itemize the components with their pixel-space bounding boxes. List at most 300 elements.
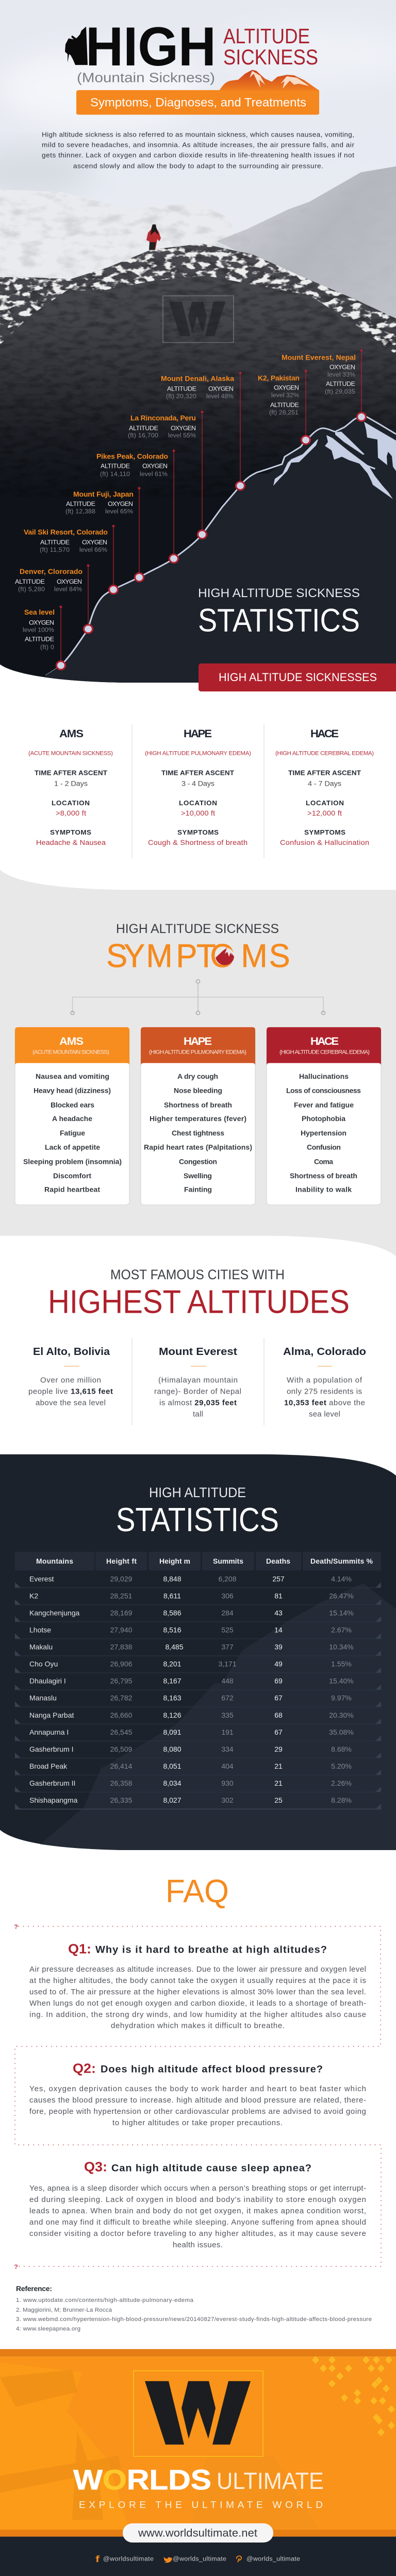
faq: question 2 xyxy=(29,2061,366,2127)
card: HACE symptoms: HACE xyxy=(310,1036,339,1047)
row: K2: 306 xyxy=(221,1592,234,1600)
heading: high altitude sickness statistics: STATISTICS xyxy=(198,602,360,638)
row: Manaslu: 672 xyxy=(221,1694,234,1702)
label: Vail Ski Resort xyxy=(24,529,108,553)
label: Mount Fuji: ALTITUDE xyxy=(66,500,95,507)
heading: high altitude sickness statistics xyxy=(198,586,360,638)
row: Gasherbrum II: 930 xyxy=(221,1780,234,1787)
text block: references: Reference: xyxy=(16,2285,52,2293)
faq: question 1: Air pressure decreases as altitude increases. Due to the lower air pressure and oxygen level xyxy=(29,1965,366,1974)
row: Broad Peak: 21 xyxy=(274,1762,283,1770)
faq: question 3 xyxy=(29,2159,366,2249)
city: Alma: 10,353 feet above the xyxy=(284,1399,365,1407)
card: HAPE symptoms: Congestion xyxy=(179,1158,217,1165)
row: Annapurna I: Annapurna I xyxy=(29,1728,69,1736)
row: Kangchenjunga xyxy=(29,1609,354,1617)
row: Lhotse: 27,940 xyxy=(110,1626,133,1634)
chart: altitude and oxygen mountain profile xyxy=(15,349,396,689)
pin: K2 marker xyxy=(301,370,310,444)
city: El Alto: Over one million xyxy=(40,1377,101,1384)
text block: references: 3. www.webmd.com/hypertension-high-blood-pressure/news/20140827/everest-study-finds-high-altitude-affects-blood-pressure xyxy=(16,2316,372,2323)
row: Nanga Parbat: 68 xyxy=(274,1711,283,1719)
faq: question 1 xyxy=(29,1941,366,2030)
row: Gasherbrum I: 26,509 xyxy=(110,1745,132,1753)
label: Vail Ski Resort: OXYGEN xyxy=(82,539,107,546)
column: HACE: TIME AFTER ASCENT xyxy=(288,769,361,777)
heading: high altitude sickness symptoms: SYMPTOMS xyxy=(106,938,290,974)
card: AMS symptoms: Heavy head (dizziness) xyxy=(34,1087,111,1095)
faq: question 3: health issues. xyxy=(173,2241,223,2249)
icon: facebook: f xyxy=(95,2554,100,2564)
column: AMS: AMS xyxy=(59,727,84,740)
faq: question 1: ing. In addition, the strong dry winds, and low humidity at the higher altitudes also cause xyxy=(29,2011,366,2019)
label: K2: level 32% xyxy=(271,392,299,399)
card: HACE symptoms: Hypertension xyxy=(301,1129,346,1137)
column: HACE: Confusion & Hallucination xyxy=(280,839,369,847)
column: AMS: (ACUTE MOUNTAIN SICKNESS) xyxy=(28,751,113,756)
row: Everest: 6,208 xyxy=(218,1575,237,1583)
text block: introduction: mild to severe headaches, and insomnia. As altitude increases, the air pressure falls, and air xyxy=(42,141,355,149)
row: Gasherbrum I: 8.68% xyxy=(331,1745,352,1753)
panel: statistics table background xyxy=(0,1454,396,1850)
row: Lhotse xyxy=(29,1626,352,1634)
column: HAPE xyxy=(145,727,251,847)
footer: worlds ultimate brand xyxy=(0,2349,396,2537)
label: Mount Denali xyxy=(161,375,234,400)
row: Manaslu: 9.97% xyxy=(331,1694,352,1702)
city: Alma: only 275 residents is xyxy=(287,1388,362,1396)
row: Gasherbrum II: 26,358 xyxy=(110,1780,133,1787)
card: HAPE symptoms: Swelling xyxy=(184,1172,212,1180)
heading: most famous cities with highest altitudes: HIGHEST ALTITUDES xyxy=(48,1283,350,1320)
city: El Alto: people live 13,615 feet xyxy=(28,1388,113,1396)
card: HAPE symptoms: A dry cough xyxy=(177,1073,218,1080)
faq: question 1: Q1: xyxy=(68,1941,91,1956)
row: Shishapangma: 302 xyxy=(221,1797,234,1804)
text block: introduction: High altitude sickness is also referred to as mountain sickness, which causes nausea, vomiting, xyxy=(42,131,354,139)
label: Mount Everest: OXYGEN xyxy=(329,364,355,370)
label: Pikes Peak: Pikes Peak, Colorado xyxy=(96,453,168,460)
pin: Fuji marker xyxy=(135,487,143,582)
pin: La Rinconada marker xyxy=(198,411,206,539)
icon: mountain inside O xyxy=(216,947,235,965)
social links: @worldsultimate xyxy=(103,2555,154,2562)
row: Dhaulagiri I: 26,795 xyxy=(110,1677,133,1685)
column: HACE: >12,000 ft xyxy=(307,809,342,818)
banner: high altitude sicknesses xyxy=(199,664,396,691)
heading: high altitude statistics xyxy=(116,1485,279,1539)
title: HIGH: HIGH xyxy=(86,16,216,77)
row: Annapurna I: 35.08% xyxy=(329,1728,354,1736)
column: HAPE: Cough & Shortness of breath xyxy=(148,839,248,847)
card: AMS symptoms: AMS xyxy=(59,1036,84,1047)
card: AMS symptoms: A headache xyxy=(52,1115,92,1123)
text block: references: 4: www.sleepapnea.org xyxy=(16,2326,80,2332)
banner: high altitude sicknesses: HIGH ALTITUDE SICKNESSES xyxy=(219,671,377,684)
text block: introduction: ascend slowly and allow the body to adapt to the surrounding air pressure. xyxy=(73,162,323,170)
heading: most famous cities with highest altitudes xyxy=(48,1266,350,1320)
column: HAPE: 3 - 4 Days xyxy=(182,780,214,788)
card: HACE symptoms xyxy=(267,1027,381,1205)
banner: orange mountain bar: Symptoms, Diagnoses, and Treatments xyxy=(90,96,306,109)
table header: Mountains xyxy=(36,1557,73,1565)
row: Cho Oyu: 26,906 xyxy=(110,1660,133,1668)
label: Mount Everest xyxy=(282,354,356,395)
city: El Alto: El Alto, Bolivia xyxy=(33,1346,110,1358)
panel: cities xyxy=(28,1337,366,1426)
label: Mount Denali: OXYGEN xyxy=(208,385,234,392)
row: K2: 8,611 xyxy=(163,1592,181,1600)
card: HAPE symptoms: Rapid heart rates (Palpitations) xyxy=(144,1144,252,1151)
label: Pikes Peak: ALTITUDE xyxy=(101,463,130,469)
column: HAPE: LOCATION xyxy=(179,799,217,807)
card: HACE symptoms: Shortness of breath xyxy=(290,1172,357,1180)
card: HACE symptoms: Inability to walk xyxy=(295,1186,352,1194)
faq: question 3: Q3: xyxy=(84,2159,107,2175)
column: HAPE: (HIGH ALTITUDE PULMONARY EDEMA) xyxy=(145,751,251,756)
row: Shishapangma: 25 xyxy=(274,1797,283,1804)
row: Nanga Parbat: 26,660 xyxy=(110,1711,133,1719)
row: Kangchenjunga: 43 xyxy=(274,1609,283,1617)
decorative faded photo xyxy=(0,2362,129,2530)
row: Cho Oyu: 1.55% xyxy=(331,1660,352,1668)
row: Lhotse: 14 xyxy=(274,1626,283,1634)
panel: symptoms background xyxy=(0,870,396,1257)
card: HACE symptoms: Loss of consciousness xyxy=(286,1087,361,1095)
row: K2: 28,251 xyxy=(110,1592,132,1600)
city: Mount Everest: range)- Border of Nepal xyxy=(154,1388,241,1396)
label: Vail Ski Resort: ALTITUDE xyxy=(40,539,70,546)
city: Mount Everest: tall xyxy=(193,1411,203,1418)
title: SICKNESS: SICKNESS xyxy=(223,45,318,70)
row: Annapurna I: 26,545 xyxy=(110,1728,133,1736)
icon: twitter xyxy=(163,2557,172,2563)
row: Dhaulagiri I: 8,167 xyxy=(163,1677,182,1685)
card: HAPE symptoms: Fainting xyxy=(184,1186,212,1194)
row: Lhotse: 8,516 xyxy=(163,1626,182,1634)
table header: Deaths xyxy=(266,1557,290,1565)
row: Manaslu: 26,782 xyxy=(110,1694,132,1702)
label: Mount Fuji: OXYGEN xyxy=(108,500,133,507)
label: La Rinconada xyxy=(128,414,196,439)
icon: question mark: ? xyxy=(14,1923,18,1930)
table header: Height ft xyxy=(106,1557,137,1565)
city: Alma: Alma, Colorado xyxy=(283,1346,366,1358)
column: HACE xyxy=(275,727,374,847)
pin: Vail marker xyxy=(109,525,118,594)
city: Mount Everest: is almost 29,035 feet xyxy=(159,1399,237,1407)
label: Sea level: (ft) 0 xyxy=(40,643,54,651)
faq: question 1: used to of. The air pressure at the higher elevations is almost 30% lower than the sea level. xyxy=(29,1988,366,1996)
row: Gasherbrum II: 2.26% xyxy=(331,1780,352,1787)
table header: Summits xyxy=(213,1557,243,1565)
row: Broad Peak: 26,414 xyxy=(110,1762,133,1770)
snow caps xyxy=(273,422,396,499)
label: Mount Fuji xyxy=(65,490,134,515)
faq: question 3: ed during sleeping. Lack of oxygen in blood and body's inability to store enough oxygen xyxy=(29,2196,366,2204)
icon: mountaineer on the summit xyxy=(146,225,161,250)
faq: question 2: Yes, oxygen deprivation causes the body to work harder and heart to beat faster which xyxy=(29,2085,366,2093)
card: HAPE symptoms: Shortness of breath xyxy=(164,1101,232,1109)
logo: title lockup xyxy=(65,16,319,115)
row: Manaslu: 8,163 xyxy=(163,1694,182,1702)
label: Mount Denali: (ft) 20,320 xyxy=(166,393,196,400)
card: AMS symptoms: (ACUTE MOUNTAIN SICKNESS) xyxy=(32,1049,109,1055)
label: K2: (ft) 28,251 xyxy=(269,409,299,416)
text block: introduction xyxy=(42,131,355,170)
row: Annapurna I: 8,091 xyxy=(163,1728,182,1736)
row: Cho Oyu xyxy=(29,1660,352,1668)
label: Mount Fuji: Mount Fuji, Japan xyxy=(73,490,134,498)
row: Manaslu: Manaslu xyxy=(29,1694,57,1702)
card: HAPE symptoms: Chest tightness xyxy=(172,1129,224,1137)
faq: question 1: at the higher altitudes, the body cannot take the oxygen it usually requires at the pace it is xyxy=(29,1977,366,1985)
row: Lhotse: Lhotse xyxy=(29,1626,51,1634)
row: Broad Peak: Broad Peak xyxy=(29,1762,67,1770)
card: HAPE symptoms: Higher temperatures (fever) xyxy=(150,1115,246,1123)
faq: question 3: and one may find it difficult to breathe while sleeping. Anyone suffering from apnea should xyxy=(29,2218,366,2227)
title: ALTITUDE: ALTITUDE xyxy=(223,24,310,48)
label: K2: OXYGEN xyxy=(274,384,299,392)
city: Alma xyxy=(283,1346,366,1418)
logo text: Ultimate: ULTIMATE xyxy=(217,2468,324,2494)
row: K2: K2 xyxy=(29,1592,38,1600)
column: HACE: HACE xyxy=(310,727,339,740)
card: HAPE symptoms: Nose bleeding xyxy=(174,1087,222,1095)
row: Broad Peak xyxy=(29,1762,352,1770)
row: Nanga Parbat: 335 xyxy=(221,1711,234,1719)
card: AMS symptoms: Rapid heartbeat xyxy=(44,1186,100,1194)
label: Pikes Peak: OXYGEN xyxy=(142,463,168,469)
row: Lhotse: 2.67% xyxy=(331,1626,352,1634)
label: Pikes Peak: level 61% xyxy=(140,470,168,478)
column: HAPE: >10,000 ft xyxy=(181,809,215,818)
faq: question 3: Yes, apnea is a sleep disorder which occurs when a person’s breathing stops or get interrupt- xyxy=(29,2184,366,2193)
row: Broad Peak: 404 xyxy=(221,1762,234,1770)
card: AMS symptoms: Lack of appetite xyxy=(45,1144,100,1151)
row: Nanga Parbat: Nanga Parbat xyxy=(29,1711,74,1719)
website pill xyxy=(123,2523,273,2543)
label: Denver: OXYGEN xyxy=(57,578,82,585)
faq: question 3: Can high altitude cause sleep apnea? xyxy=(111,2163,311,2174)
pin: Denver marker xyxy=(84,564,93,633)
banner: orange mountain bar xyxy=(76,70,319,115)
row: Makalu xyxy=(29,1643,354,1651)
row: K2: 81 xyxy=(274,1592,283,1600)
column: HAPE: TIME AFTER ASCENT xyxy=(161,769,234,777)
card: HAPE symptoms: (HIGH ALTITUDE PULMONARY EDEMA) xyxy=(149,1049,246,1055)
row: Nanga Parbat: 20.30% xyxy=(329,1711,354,1719)
footer: dark bar xyxy=(0,2537,396,2576)
social links xyxy=(95,2554,300,2564)
heading: high altitude sickness symptoms: HIGH ALTITUDE SICKNESS xyxy=(116,922,279,936)
diagram: connector tree xyxy=(71,979,325,1014)
table header xyxy=(15,1552,381,1570)
row: Gasherbrum II: Gasherbrum II xyxy=(29,1780,75,1787)
table header: Death/Summits % xyxy=(310,1557,373,1565)
icon: climber silhouette xyxy=(65,27,88,65)
column: HACE: (HIGH ALTITUDE CEREBRAL EDEMA) xyxy=(275,751,374,756)
label: Vail Ski Resort: (ft) 11,570 xyxy=(40,546,70,553)
faq: question 3: consider visiting a doctor before traveling to any higher altitudes, as it may cause severe xyxy=(29,2230,366,2238)
text block: references xyxy=(16,2285,372,2332)
column: HAPE: HAPE xyxy=(184,727,212,740)
city: Alma: sea level xyxy=(309,1411,340,1418)
icon: watermark W logo in the rock xyxy=(163,296,234,343)
panel: sickness comparison columns xyxy=(28,724,374,858)
heading: high altitude sickness symptoms xyxy=(107,924,289,968)
row: Kangchenjunga: 8,586 xyxy=(163,1609,182,1617)
text block: introduction: gets thinner. Lack of oxygen and carbon dioxide results in life-threatening health issues if not xyxy=(42,151,354,159)
faq: question 2: Q2: xyxy=(73,2061,96,2076)
label: Sea level xyxy=(23,608,55,651)
row: Gasherbrum I: 8,080 xyxy=(163,1745,182,1753)
row: Lhotse: 525 xyxy=(221,1626,234,1634)
card: AMS symptoms: Blocked ears xyxy=(51,1101,94,1109)
label: La Rinconada: (ft) 16,700 xyxy=(128,432,158,439)
label: Mount Fuji: (ft) 12,388 xyxy=(65,508,95,515)
row: Makalu: 377 xyxy=(221,1643,234,1651)
social links: @worlds_ultimate xyxy=(173,2555,226,2562)
row: Shishapangma: 8.28% xyxy=(331,1797,352,1804)
row: Manaslu: 67 xyxy=(274,1694,283,1702)
label: La Rinconada: OXYGEN xyxy=(171,425,196,432)
pin: Pikes Peak marker xyxy=(169,450,178,563)
row: Gasherbrum I: 334 xyxy=(221,1745,234,1753)
city: El Alto xyxy=(28,1346,113,1407)
label: K2: K2, Pakistan xyxy=(258,375,300,382)
column: HAPE: SYMPTOMS xyxy=(177,828,219,836)
row: Cho Oyu: Cho Oyu xyxy=(29,1660,58,1668)
heading: high altitude statistics: STATISTICS xyxy=(116,1501,279,1539)
text block: references: 1. www.uptodate.com/contents/high-altitude-pulmonary-edema xyxy=(16,2297,194,2303)
icon: question mark: ? xyxy=(14,2263,18,2270)
faq: question 2: causes the blood pressure to increase. high altitude and blood pressure are related, there- xyxy=(29,2096,366,2105)
column: AMS: >8,000 ft xyxy=(56,809,86,818)
label: Mount Everest: level 33% xyxy=(327,371,355,378)
row: Everest: Everest xyxy=(29,1575,54,1583)
label: Mount Denali: Mount Denali, Alaska xyxy=(161,375,234,382)
row: Nanga Parbat: 8,126 xyxy=(163,1711,182,1719)
heading: high altitude sickness statistics: HIGH ALTITUDE SICKNESS xyxy=(198,586,360,600)
decorative diamonds xyxy=(312,2356,395,2436)
label: La Rinconada: La Rinconada, Peru xyxy=(130,414,196,422)
row: Broad Peak: 8,051 xyxy=(163,1762,182,1770)
column: HACE: SYMPTOMS xyxy=(304,828,345,836)
label: Mount Denali: level 48% xyxy=(206,393,234,400)
card: HACE symptoms: Hallucinations xyxy=(299,1073,349,1080)
card: HACE symptoms: Coma xyxy=(314,1158,333,1165)
column: AMS xyxy=(28,727,113,847)
row: Cho Oyu: 49 xyxy=(274,1660,283,1668)
label: Mount Denali: ALTITUDE xyxy=(167,385,196,392)
row: Gasherbrum I: 29 xyxy=(274,1745,283,1753)
row: Kangchenjunga: Kangchenjunga xyxy=(29,1609,80,1617)
table: mountains statistics xyxy=(15,1552,381,1809)
heading: high altitude statistics: HIGH ALTITUDE xyxy=(149,1485,246,1500)
row: Annapurna I xyxy=(29,1728,354,1736)
row: Kangchenjunga: 28,169 xyxy=(110,1609,132,1617)
faq: question 2: fore, people with hypertension or other cardiovascular problems are advised to avoid going xyxy=(29,2108,366,2116)
row: Makalu: 10.34% xyxy=(329,1643,354,1651)
row: Gasherbrum II xyxy=(29,1780,352,1787)
row: Makalu: 39 xyxy=(274,1643,283,1651)
logo text: Worlds: WORLDS xyxy=(73,2464,211,2496)
column: AMS: SYMPTOMS xyxy=(50,828,91,836)
tagline: EXPLORE THE ULTIMATE WORLD xyxy=(79,2500,323,2510)
faq: question 2: Does high altitude affect blood pressure? xyxy=(101,2064,323,2075)
text block: references: 2. Maggiorini, M; Brunner-La Rocca xyxy=(16,2307,112,2313)
city: El Alto: above the sea level xyxy=(36,1399,106,1407)
row: Cho Oyu: 8,201 xyxy=(163,1660,182,1668)
row: Dhaulagiri I: Dhaulagiri I xyxy=(29,1677,66,1685)
table header: Height m xyxy=(159,1557,190,1565)
row: Broad Peak: 5.20% xyxy=(331,1762,352,1770)
row: Everest: 29,029 xyxy=(110,1575,132,1583)
faq: question 1: Why is it hard to breathe at high altitudes? xyxy=(95,1944,327,1955)
row: K2 xyxy=(29,1592,354,1600)
row: Shishapangma: Shishapangma xyxy=(29,1797,78,1804)
row: Gasherbrum II: 8,034 xyxy=(163,1780,182,1787)
column: AMS: LOCATION xyxy=(52,799,90,807)
row: Manaslu xyxy=(29,1694,352,1702)
label: Sea level: Sea level xyxy=(24,608,55,616)
row: Everest: 4.14% xyxy=(331,1575,352,1583)
label: Pikes Peak: (ft) 14,110 xyxy=(100,470,130,478)
faq: question 3: leads to apnea. When brain and body do not get oxygen, it makes apnea condition worst, xyxy=(29,2207,366,2215)
heading: most famous cities with highest altitudes: MOST FAMOUS CITIES WITH xyxy=(110,1266,285,1282)
label: Mount Fuji: level 65% xyxy=(105,508,133,515)
card: AMS symptoms: Discomfort xyxy=(53,1172,91,1180)
row: Dhaulagiri I xyxy=(29,1677,354,1685)
label: Mount Everest: Mount Everest, Nepal xyxy=(282,354,356,361)
faq: question 1: dehydration which makes it difficult to breathe. xyxy=(111,2022,285,2030)
row: Cho Oyu: 3,171 xyxy=(218,1660,237,1668)
column: AMS: 1 - 2 Days xyxy=(54,780,88,788)
card: AMS symptoms: Nausea and vomiting xyxy=(36,1073,109,1080)
faq: question 1: When lungs do not get enough oxygen and carbon dioxide, it leads to a shortage of breath- xyxy=(29,1999,366,2008)
pin: Everest marker xyxy=(357,349,366,421)
label: Vail Ski Resort: Vail Ski Resort, Colorado xyxy=(24,529,108,536)
table row lines xyxy=(15,1582,381,1809)
panel: hero mountain photo background xyxy=(0,0,396,689)
row: Annapurna I: 67 xyxy=(274,1728,283,1736)
card: HAPE symptoms xyxy=(141,1027,255,1205)
icon: pinterest xyxy=(237,2556,241,2562)
label: Denver: Denver, Clororado xyxy=(20,568,82,575)
heading: FAQ: FAQ xyxy=(166,1873,229,1909)
label: Mount Everest: ALTITUDE xyxy=(326,380,355,387)
card: HAPE symptoms: HAPE xyxy=(184,1036,212,1047)
card: HACE symptoms: Fever and fatigue xyxy=(294,1101,354,1109)
row: Makalu: 8,485 xyxy=(165,1643,184,1651)
card: HACE symptoms: Confusion xyxy=(307,1144,341,1151)
label: Sea level: OXYGEN xyxy=(29,619,54,626)
website pill: www.worldsultimate.net xyxy=(138,2527,257,2539)
row: Gasherbrum I: Gasherbrum I xyxy=(29,1745,74,1753)
column: AMS: TIME AFTER ASCENT xyxy=(35,769,107,777)
label: Denver xyxy=(15,568,82,592)
row: Annapurna I: 191 xyxy=(221,1728,234,1736)
row: Makalu: 27,838 xyxy=(110,1643,133,1651)
row: K2: 26.47% xyxy=(329,1592,354,1600)
city: Mount Everest: (Himalayan mountain xyxy=(158,1377,238,1384)
column: HACE: LOCATION xyxy=(306,799,344,807)
watermark: mountain xyxy=(40,1583,396,1850)
column: AMS: Headache & Nausea xyxy=(36,839,106,847)
card: HACE symptoms: Photophobia xyxy=(302,1115,345,1123)
city: Alma: With a population of xyxy=(287,1377,362,1384)
